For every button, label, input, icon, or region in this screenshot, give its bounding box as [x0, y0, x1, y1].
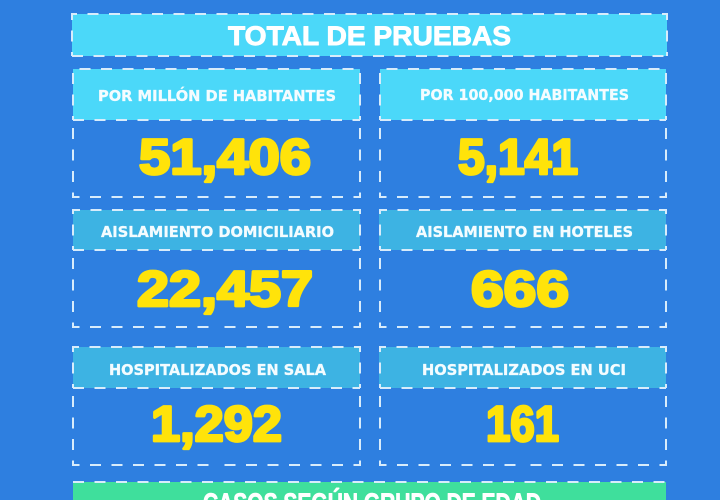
label: aislamiento en hoteles: AISLAMIENTO EN HOTELES — [416, 223, 633, 241]
label: hospitalizados en sala: HOSPITALIZADOS EN SALA — [109, 361, 326, 379]
panel: por 100,000 habitantes — [380, 69, 666, 197]
panel: hospitalizados en sala — [73, 347, 360, 465]
panel: por millón de habitantes — [73, 69, 360, 197]
label: hospitalizados en uci: HOSPITALIZADOS EN UCI — [422, 361, 626, 379]
banner: casos según grupo de edad — [73, 482, 666, 500]
number: 1,292: 1,292 — [151, 396, 282, 452]
title banner: total de pruebas — [72, 14, 667, 56]
label: aislamiento domiciliario: AISLAMIENTO DOMICILIARIO — [101, 223, 334, 241]
number: 51,406: 51,406 — [139, 129, 311, 185]
panel: aislamiento domiciliario — [73, 210, 360, 327]
number: 161: 161 — [486, 396, 559, 452]
label: por 100,000 habitantes: POR 100,000 HABITANTES — [420, 86, 629, 104]
panel: aislamiento en hoteles — [379, 210, 666, 327]
panel: hospitalizados en uci — [379, 347, 666, 465]
title banner: total de pruebas: TOTAL DE PRUEBAS — [228, 21, 511, 51]
number: 666: 666 — [471, 261, 569, 317]
number: 22,457: 22,457 — [137, 261, 313, 317]
number: 5,141: 5,141 — [458, 129, 578, 185]
label: por millón de habitantes: POR MILLÓN DE HABITANTES — [98, 86, 336, 105]
